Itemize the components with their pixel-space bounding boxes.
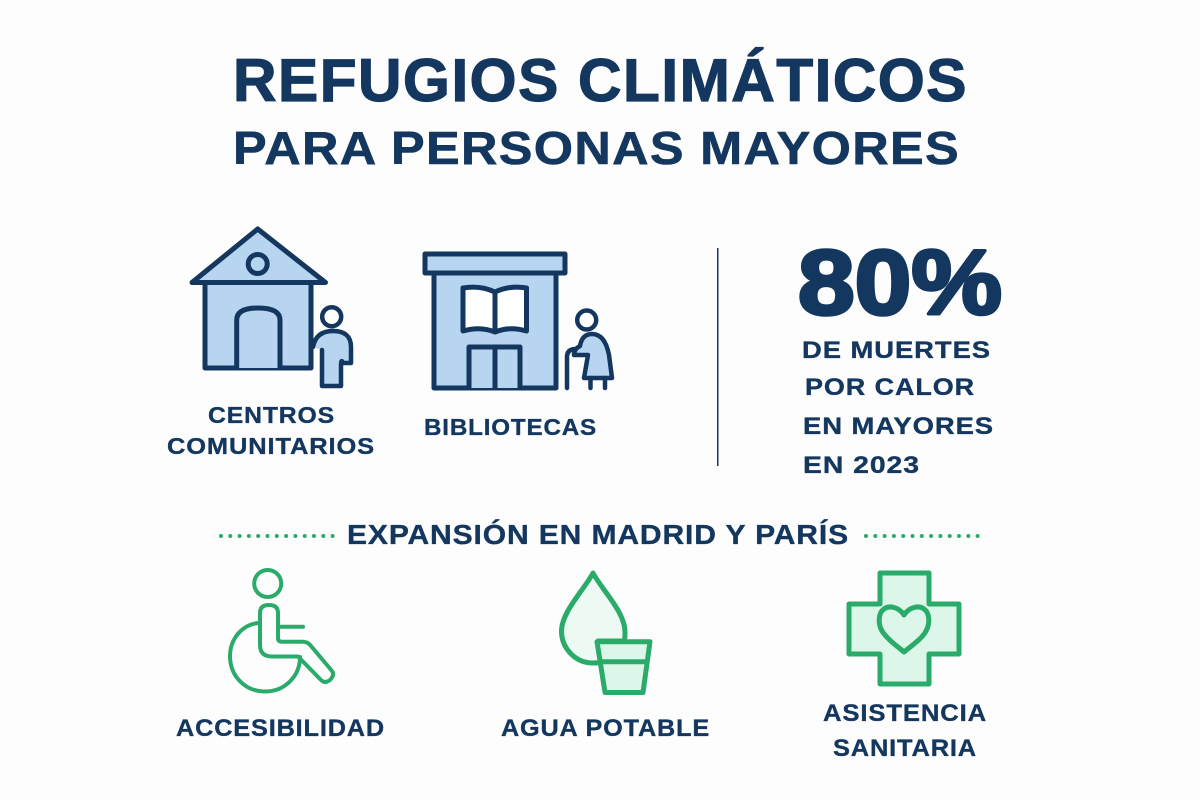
icon: water drop and glass — [562, 573, 650, 692]
label: asistencia sanitaria: SANITARIA — [833, 735, 977, 762]
icon: community centre with person — [192, 229, 351, 386]
label: centros comunitarios: CENTROS — [208, 402, 335, 428]
statistic description: EN 2023 — [803, 452, 920, 479]
icon: medical cross with heart — [849, 573, 959, 684]
label: agua potable: AGUA POTABLE — [501, 715, 710, 742]
label: centros comunitarios — [167, 402, 375, 459]
statistic: 80%: 80% — [798, 232, 1002, 334]
statistic description: DE MUERTES — [802, 337, 991, 364]
title — [233, 47, 968, 174]
statistic description — [802, 337, 994, 479]
label: accesibilidad: ACCESIBILIDAD — [176, 715, 385, 742]
statistic description: POR CALOR — [805, 374, 975, 401]
title: PARA PERSONAS MAYORES — [233, 122, 960, 174]
label: asistencia sanitaria — [823, 700, 987, 762]
label: centros comunitarios: COMUNITARIOS — [167, 433, 375, 459]
section heading with dotted lines: EXPANSIÓN EN MADRID Y PARÍS — [347, 519, 849, 550]
icon: wheelchair — [230, 570, 333, 692]
title: REFUGIOS CLIMÁTICOS — [233, 47, 968, 114]
vertical divider — [717, 248, 718, 466]
statistic description: EN MAYORES — [803, 413, 994, 440]
icon: library with elderly person — [425, 254, 612, 388]
label: bibliotecas: BIBLIOTECAS — [424, 414, 597, 440]
label: asistencia sanitaria: ASISTENCIA — [823, 700, 987, 727]
